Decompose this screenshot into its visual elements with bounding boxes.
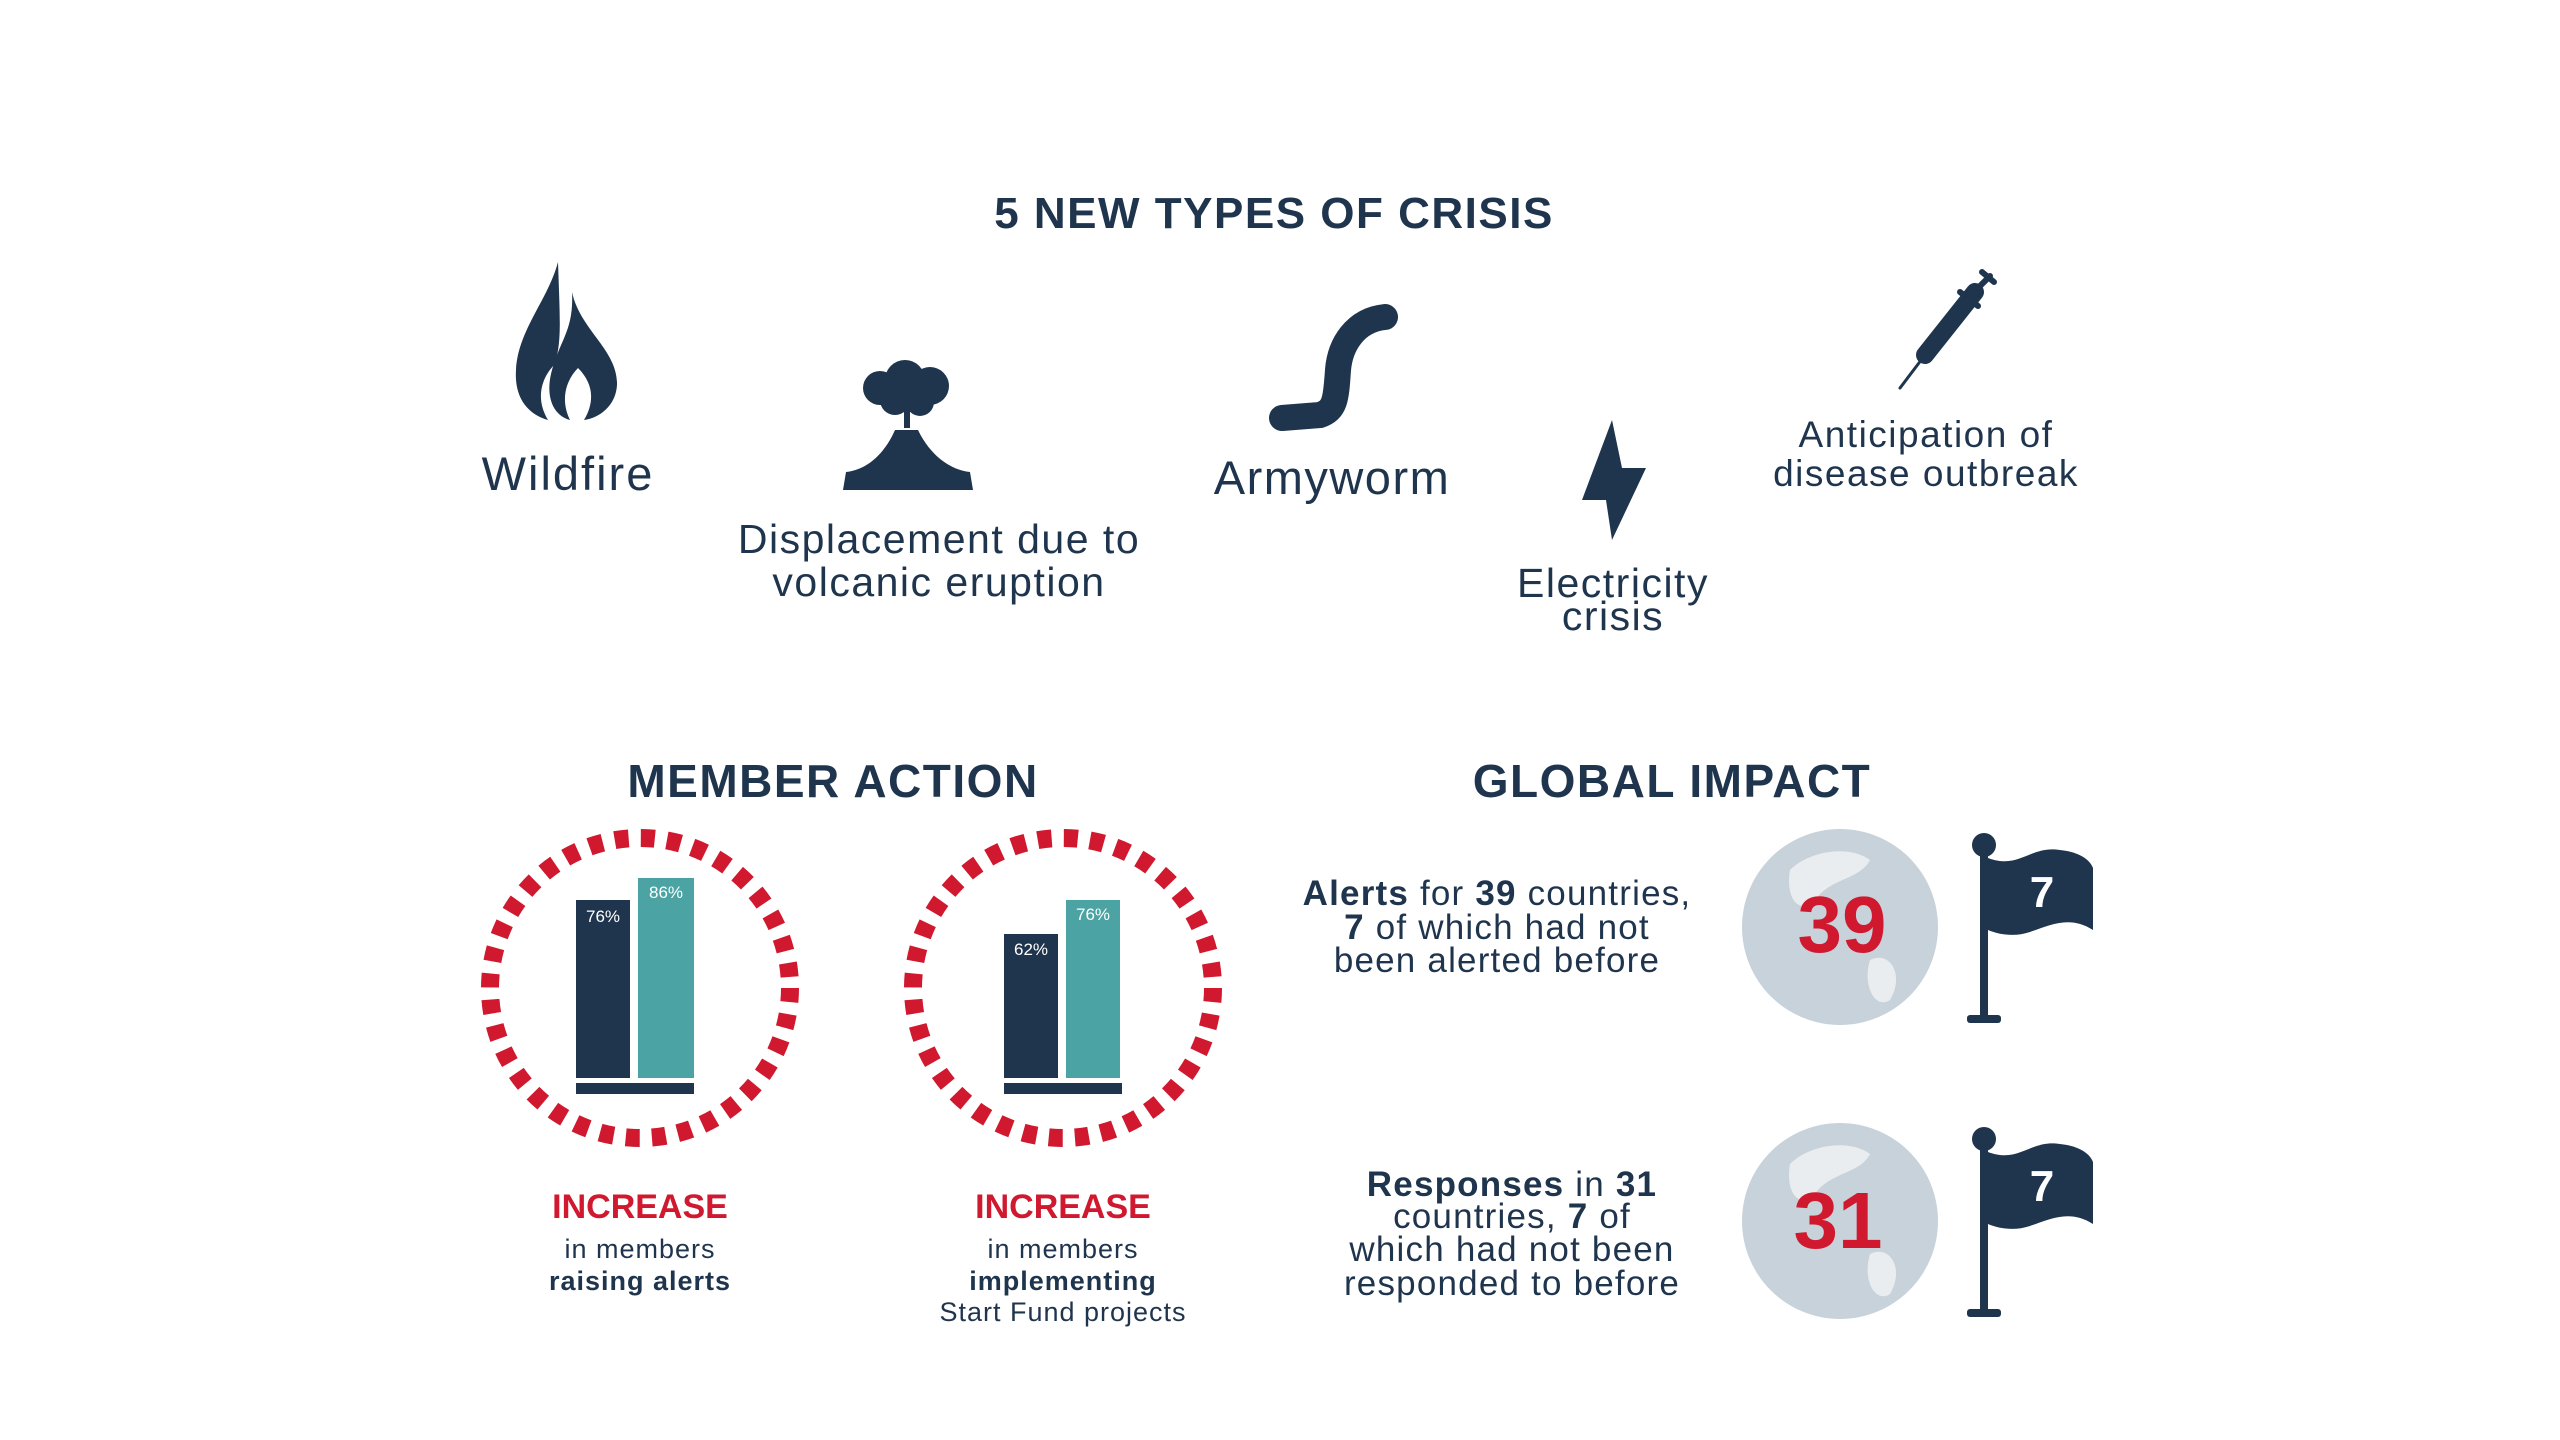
caption: raising alerts: INCREASE (552, 1188, 728, 1226)
heading: member action: MEMBER ACTION (627, 755, 1039, 807)
caption: implementing (939, 1188, 1187, 1327)
chart: raising alerts: 76% (586, 907, 620, 926)
caption: raising alerts: in members (564, 1234, 716, 1264)
text: alerts: Alerts for 39 countries, (1303, 874, 1691, 913)
icon: syringe (1900, 272, 1994, 388)
icon: volcano (843, 360, 973, 490)
label: volcano: volcanic eruption (772, 559, 1106, 605)
label: armyworm: Armyworm (1214, 451, 1450, 504)
chart: implementing: 62% (1014, 940, 1048, 959)
icon: flag 7: 7 (2030, 868, 2054, 917)
caption: implementing: Start Fund projects (939, 1297, 1187, 1327)
text: alerts: 7 of which had not (1344, 908, 1650, 947)
label: wildfire: Wildfire (482, 447, 654, 500)
icon: armyworm (1282, 317, 1385, 418)
icon: globe 39: 39 (1798, 880, 1886, 969)
chart: implementing: 76% (1076, 905, 1110, 924)
icon: flag 7 (1967, 833, 2093, 1023)
icon: globe 39 (1742, 829, 1938, 1025)
icon: flag 7 second: 7 (2030, 1162, 2054, 1211)
icon: globe 31: 31 (1794, 1176, 1882, 1265)
text: alerts: been alerted before (1334, 941, 1660, 980)
heading: global impact: GLOBAL IMPACT (1473, 755, 1871, 807)
caption: raising alerts (549, 1188, 731, 1296)
label: electricity: crisis (1562, 593, 1664, 639)
icon: wildfire (516, 262, 617, 420)
text: responses: Responses in 31 (1367, 1165, 1657, 1204)
caption: implementing: in members (987, 1234, 1139, 1264)
chart: implementing (913, 838, 1213, 1138)
title: 5 NEW TYPES OF CRISIS (994, 189, 1554, 238)
icon: globe 31 (1742, 1123, 1938, 1319)
chart: raising alerts (490, 838, 790, 1138)
chart: raising alerts: 86% (649, 883, 683, 902)
icon: lightning (1582, 420, 1646, 540)
text: responses: countries, 7 of (1393, 1197, 1631, 1236)
caption: raising alerts: raising alerts (549, 1266, 731, 1296)
caption: implementing: implementing (969, 1266, 1157, 1296)
label: electricity: Electricity (1517, 560, 1709, 606)
icon: flag 7 second (1967, 1127, 2093, 1317)
label: disease: disease outbreak (1773, 453, 2079, 494)
label: volcano: Displacement due to (738, 516, 1140, 562)
text: responses: responded to before (1344, 1264, 1680, 1303)
label: disease: Anticipation of (1799, 414, 2053, 455)
caption: implementing: INCREASE (975, 1188, 1151, 1226)
text: responses: which had not been (1348, 1230, 1675, 1269)
